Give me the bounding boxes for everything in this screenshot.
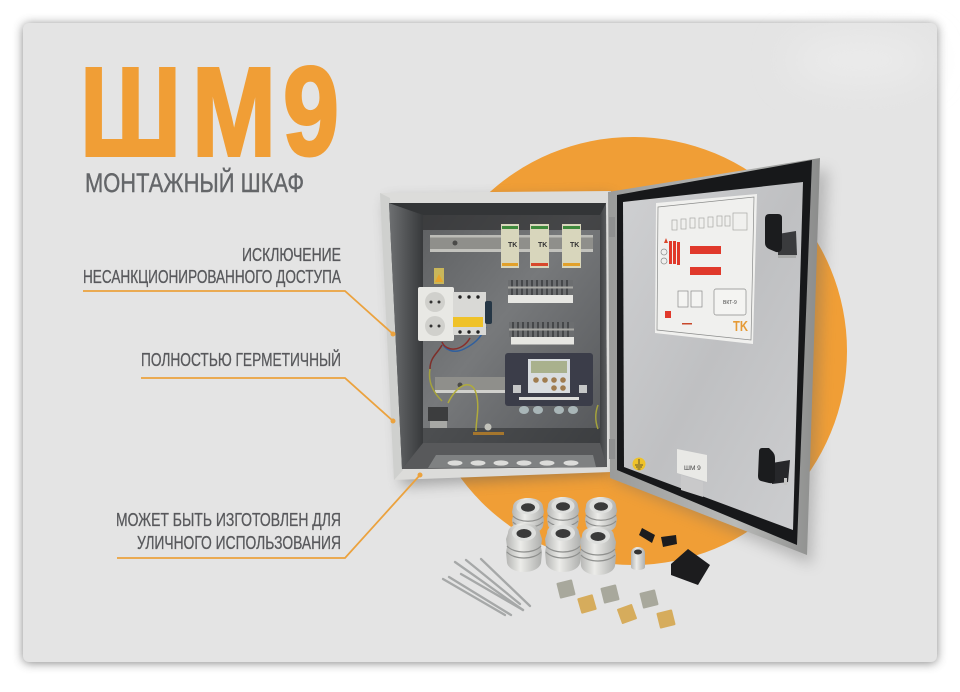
black plastic parts xyxy=(639,528,710,585)
callout: outdoor use: УЛИЧНОГО ИСПОЛЬЗОВАНИЯ xyxy=(137,533,341,553)
wiring diagram sticker: ВКТ-9 xyxy=(723,300,737,306)
lower door lock xyxy=(758,448,790,485)
wires xyxy=(430,327,598,431)
ground symbol xyxy=(632,458,646,470)
cabinet interior walls xyxy=(389,203,607,469)
cabinet body xyxy=(380,191,612,486)
door frame xyxy=(608,158,820,555)
power modules: TK xyxy=(570,242,579,249)
warning sticker xyxy=(434,268,444,284)
title: Ш xyxy=(80,42,181,182)
orange circle backdrop xyxy=(419,137,847,565)
callout: access protection: НЕСАНКЦИОНИРОВАННОГО ДОСТУПА xyxy=(83,267,341,287)
terminal block rows xyxy=(508,280,574,344)
back plate xyxy=(423,215,600,443)
title xyxy=(80,41,339,182)
callout: access protection xyxy=(83,245,396,336)
lower DIN rail xyxy=(435,377,507,393)
wiring diagram sticker xyxy=(655,194,757,344)
terminal block and ground bar xyxy=(428,407,504,435)
wiring diagram sticker: TK xyxy=(733,318,748,335)
title: М xyxy=(192,42,276,182)
cabinet frame xyxy=(380,191,611,480)
callout: sealed: ПОЛНОСТЬЮ ГЕРМЕТИЧНЫЙ xyxy=(141,349,341,370)
upper DIN rail xyxy=(430,235,593,252)
subtitle: МОНТАЖНЫЙ ШКАФ xyxy=(85,167,304,198)
callout: sealed xyxy=(141,349,396,424)
power modules: TK xyxy=(508,242,517,249)
callout: outdoor use: МОЖЕТ БЫТЬ ИЗГОТОВЛЕН ДЛЯ xyxy=(116,510,341,530)
door gasket xyxy=(617,160,812,545)
socket and breaker xyxy=(418,287,492,341)
accessories xyxy=(443,497,710,629)
power modules: TK xyxy=(538,242,547,249)
bottom gland plate xyxy=(428,455,596,468)
adhesive pads xyxy=(556,579,676,629)
door label sticker: ШМ 9 xyxy=(684,465,701,472)
power modules xyxy=(501,224,581,268)
cable ties xyxy=(443,559,530,615)
cable glands xyxy=(506,497,645,575)
door inner panel xyxy=(623,182,803,530)
hinges xyxy=(609,217,615,459)
callout: outdoor use xyxy=(116,472,422,558)
title: 9 xyxy=(283,41,339,182)
callout: access protection: ИСКЛЮЧЕНИЕ xyxy=(242,245,341,265)
door label sticker xyxy=(677,449,707,497)
cabinet door xyxy=(608,158,828,565)
upper door lock xyxy=(765,214,797,258)
controller unit xyxy=(505,353,593,414)
